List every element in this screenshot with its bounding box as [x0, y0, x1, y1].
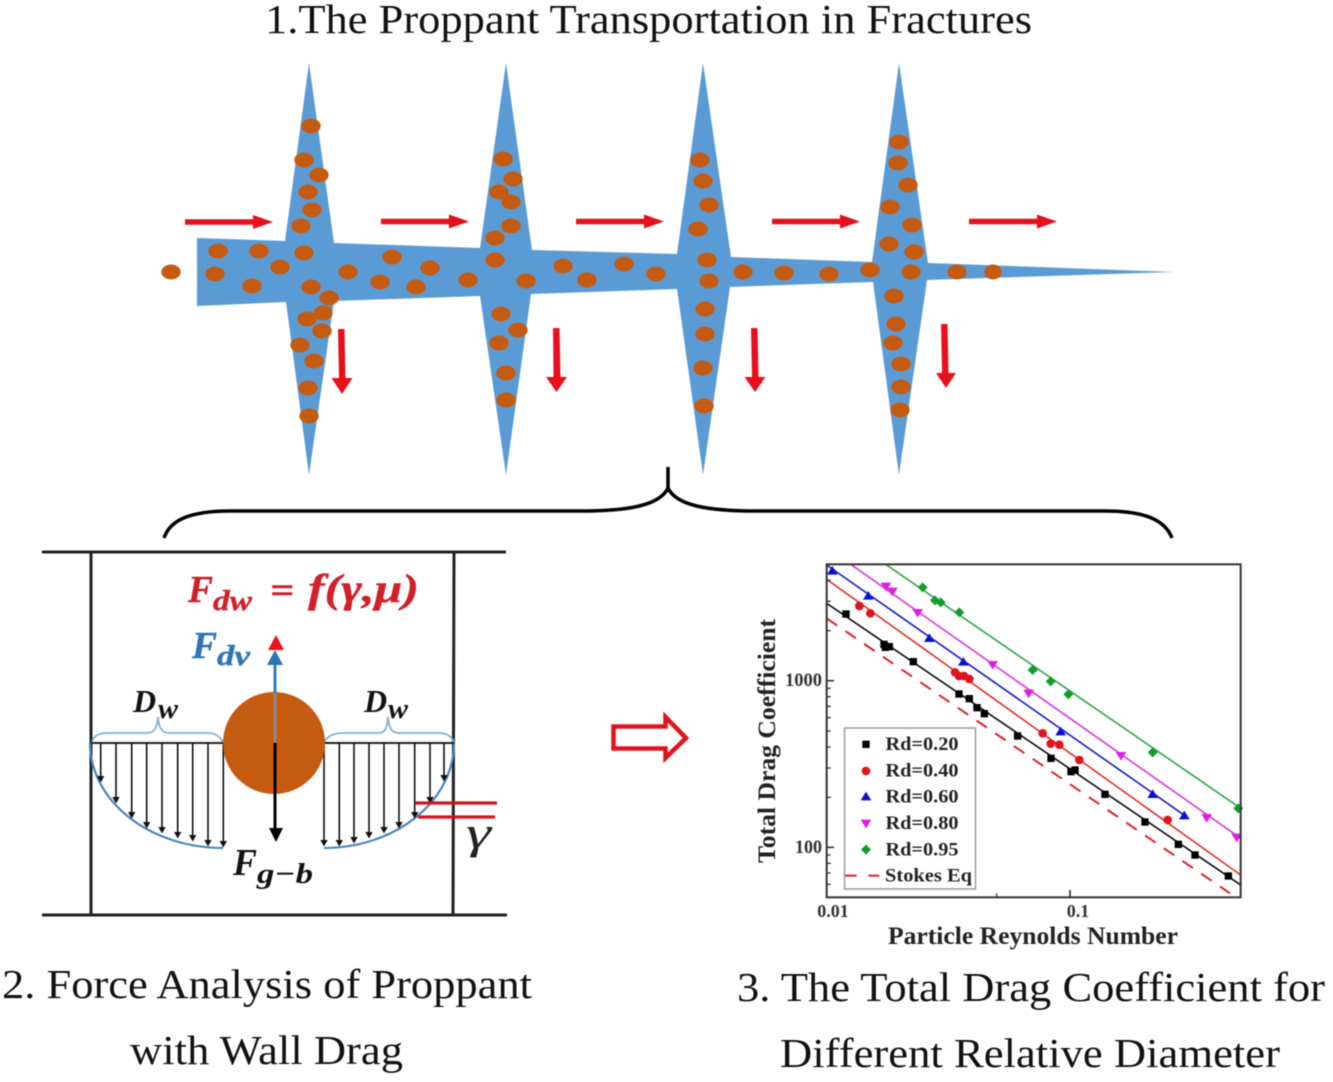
velocity profile curves: [90, 743, 454, 848]
data points: Rd 0.20: [842, 610, 1232, 880]
y axis tick labels: [785, 670, 822, 858]
legend: Rd=0.60: [886, 786, 958, 808]
label: wall distance right: D: [363, 683, 387, 719]
y axis tick labels: 100: [795, 837, 822, 858]
label: vertical drag: dv: [217, 641, 251, 672]
caption: drag coefficient: [737, 964, 1325, 1076]
legend: Rd=0.95: [886, 840, 958, 860]
settling arrows: [332, 324, 956, 394]
proppant particles: [161, 118, 1002, 424]
legend: Rd=0.40: [886, 760, 958, 782]
proppant sphere: [223, 692, 325, 794]
label: vertical drag: F: [191, 625, 217, 667]
label: wall distance right: [363, 683, 408, 725]
legend: Stokes Eq: [885, 866, 972, 886]
label: wall distance left: [132, 683, 178, 725]
legend: [844, 728, 976, 889]
y axis title: Total Drag Coefficient: [754, 618, 781, 863]
equation: wall drag force: F: [187, 569, 213, 611]
wall distance braces: [92, 717, 454, 742]
x axis title: Particle Reynolds Number: [888, 923, 1178, 950]
equation: wall drag force: f(γ,μ): [308, 566, 419, 611]
panel: proppant transport in fractures: [161, 63, 1174, 475]
panel: drag coefficient chart: [754, 564, 1243, 950]
caption: force analysis: [2, 961, 533, 1073]
label: vertical drag: [191, 625, 251, 672]
shear rate marker: γ: [466, 807, 494, 858]
label: wall distance left: w: [158, 694, 178, 725]
legend: Rd=0.80: [886, 813, 958, 834]
caption: drag coefficient: Different Relative Diameter: [780, 1030, 1280, 1076]
panel: force analysis: [42, 552, 507, 915]
data points: Rd 0.60: [827, 566, 1190, 819]
y axis tick labels: 1000: [785, 670, 822, 691]
shear rate marker: [415, 803, 497, 858]
equation: wall drag force: =: [270, 570, 294, 610]
label: wall distance left: D: [132, 683, 156, 719]
x axis tick labels: [817, 901, 1089, 921]
fitted lines: [827, 564, 1241, 893]
x axis tick labels: 0.01: [817, 901, 849, 921]
caption: force analysis: 2. Force Analysis of Proppant: [2, 961, 533, 1007]
label: wall distance right: w: [388, 694, 408, 725]
velocity arrows: [91, 743, 454, 848]
label: gravity minus buoyancy: [232, 842, 313, 890]
caption: force analysis: with Wall Drag: [130, 1027, 403, 1073]
fracture network: [197, 63, 1174, 475]
brace connecting the panels: [164, 467, 1172, 538]
data points: Rd 0.80: [881, 583, 1242, 842]
caption: drag coefficient: 3. The Total Drag Coefficient for: [737, 964, 1325, 1010]
equation: wall drag force: dw: [213, 586, 252, 617]
force arrows: [267, 635, 284, 842]
axis frame and ticks: [827, 564, 1241, 897]
label: gravity minus buoyancy: g−b: [256, 859, 313, 890]
label: gravity minus buoyancy: F: [232, 842, 257, 884]
channel walls: [42, 552, 507, 915]
plot data: [827, 564, 1243, 897]
data points: Rd 0.95: [918, 582, 1243, 813]
data points: Rd 0.40: [855, 602, 1172, 824]
arrow: analysis to result: [614, 717, 686, 758]
x axis tick labels: 0.1: [1067, 901, 1089, 921]
legend: Rd=0.20: [886, 734, 958, 755]
equation: wall drag force: [187, 566, 419, 617]
flow arrows: [185, 214, 1057, 229]
